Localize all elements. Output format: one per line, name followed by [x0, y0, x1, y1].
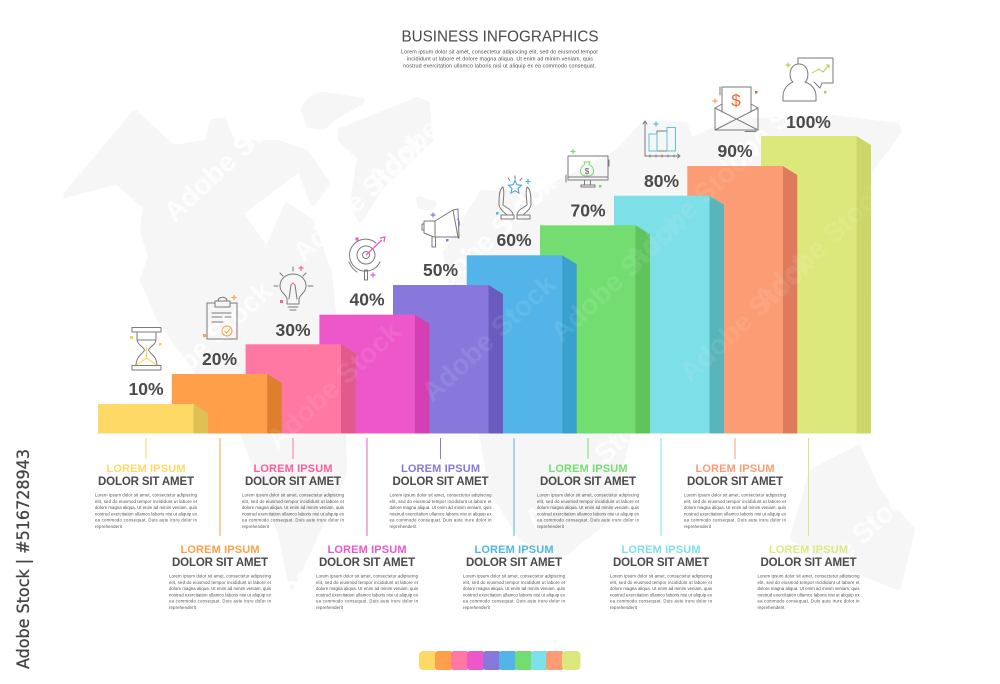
text block 1 — [95, 463, 198, 529]
text block 2: DOLOR SIT AMET — [172, 557, 268, 569]
text block 1: DOLOR SIT AMET — [98, 476, 194, 488]
text block 7: dolore magna aliqua. Ut enim ad minim veniam, quis — [537, 505, 639, 510]
text block 3: DOLOR SIT AMET — [245, 476, 341, 488]
watermark over map: Adobe Stock — [286, 128, 433, 268]
text block 5: reprehenderit — [390, 524, 417, 529]
text block 1: reprehenderit — [95, 524, 123, 529]
watermark over map: Adobe Stock — [231, 15, 378, 155]
icon: person with speech bubble — [783, 58, 833, 101]
text block 2 — [169, 544, 272, 610]
watermark over map: Adobe Stock — [2, 235, 149, 375]
text block 9: ea commodo consequat. Duis aute irure dolor in — [684, 518, 787, 523]
watermark over map: Adobe Stock — [157, 88, 304, 228]
watermark over map: Adobe Stock — [821, 102, 968, 242]
colour palette legend — [419, 651, 580, 670]
text block 4: dolore magna aliqua. Ut enim ad minim veniam, quis — [316, 586, 418, 591]
percentage labels: 90% — [717, 141, 753, 161]
text block 7: reprehenderit — [537, 524, 565, 529]
text block 6: DOLOR SIT AMET — [466, 557, 562, 569]
text block 3: LOREM IPSUM — [254, 463, 332, 475]
percentage labels: 60% — [496, 230, 532, 250]
text block 8: reprehenderit — [610, 605, 638, 610]
faint watermark over bars — [260, 135, 894, 455]
text block 8 — [610, 544, 713, 610]
bar 20% — [172, 374, 282, 434]
text block 4: Lorem ipsum dolor sit amet, consectetur adipiscing — [316, 574, 419, 578]
text block 7: elit, sed do eiusmod tempor incididunt ut labore et — [537, 499, 640, 504]
text block 2: reprehenderit — [169, 605, 197, 610]
text block 1: ea commodo consequat. Duis aute irure dolor in — [95, 518, 198, 523]
text block 5 — [390, 463, 492, 529]
bar 50% — [393, 285, 503, 434]
watermark over map: Adobe Stock — [260, 315, 407, 455]
bar 60% — [467, 255, 577, 434]
text block 6: dolore magna aliqua. Ut enim ad minim veniam, quis — [463, 586, 565, 591]
text block 8: nostrud exercitation ullamco laboris nisi ut aliquip ex — [610, 592, 713, 597]
text block 5: nostrud exercitation ullamco laboris nisi ut aliquip ex — [390, 511, 492, 516]
bar 90% — [687, 166, 797, 434]
text block 3: Lorem ipsum dolor sit amet, consectetur adipiscing — [242, 492, 345, 498]
text block 10: reprehenderit — [758, 605, 785, 610]
text block 6: Lorem ipsum dolor sit amet, consectetur adipiscing — [463, 574, 566, 578]
text block 5: elit, sed do eiusmod tempor incididunt ut labore et — [390, 499, 492, 504]
icon: envelope with dollar letter: $ — [731, 91, 741, 110]
text block 7: ea commodo consequat. Duis aute irure dolor in — [537, 518, 640, 523]
text block 5: Lorem ipsum dolor sit amet, consectetur adipiscing — [390, 492, 492, 498]
faint watermark over bars: Adobe Stock — [618, 135, 765, 275]
text block 10: ea commodo consequat. Duis aute irure dolor in — [758, 599, 860, 604]
bar 100% — [761, 136, 871, 434]
watermark over map: Adobe Stock — [692, 62, 839, 202]
text block 6: nostrud exercitation ullamco laboris nisi ut aliquip ex — [463, 592, 566, 597]
watermark over map: Adobe Stock — [563, 22, 710, 162]
text block 8: LOREM IPSUM — [622, 544, 700, 556]
watermark over map: Adobe Stock — [489, 95, 636, 235]
icon: clipboard — [203, 295, 237, 339]
icon: envelope with dollar letter — [712, 87, 758, 132]
text block 9: nostrud exercitation ullamco laboris nisi ut aliquip ex — [684, 511, 787, 516]
text block 10: Lorem ipsum dolor sit amet, consectetur adipiscing — [758, 574, 860, 578]
percentage labels: 40% — [349, 290, 385, 310]
bar 80% — [614, 196, 724, 434]
text block 6: ea commodo consequat. Duis aute irure dolor in — [463, 599, 566, 604]
faint watermark over bars: Adobe Stock — [260, 315, 407, 455]
text block 6 — [463, 544, 566, 610]
text block 6: LOREM IPSUM — [474, 544, 554, 556]
text block 2: LOREM IPSUM — [180, 544, 260, 556]
text block 4 — [316, 544, 419, 610]
icon: monitor with money bag — [566, 149, 609, 188]
text block 1: LOREM IPSUM — [106, 463, 186, 475]
percentage labels: 30% — [275, 320, 311, 340]
text block 8: Lorem ipsum dolor sit amet, consectetur adipiscing — [610, 574, 713, 578]
text block 4: ea commodo consequat. Duis aute irure dolor in — [316, 599, 419, 604]
text block 10 — [758, 544, 860, 610]
percentage labels: 20% — [202, 349, 237, 369]
text block 9: dolore magna aliqua. Ut enim ad minim veniam, quis — [684, 505, 786, 510]
text block 5: ea commodo consequat. Duis aute irure dolor in — [390, 518, 492, 523]
bar 30% — [246, 344, 356, 434]
text block 10: DOLOR SIT AMET — [760, 557, 856, 569]
watermark over map: Adobe Stock — [360, 55, 507, 195]
text block 6: elit, sed do eiusmod tempor incididunt ut labore et — [463, 580, 566, 585]
subtitle text — [401, 50, 598, 70]
title: BUSINESS INFOGRAPHICS — [402, 28, 598, 46]
icon: target with arrow — [349, 237, 385, 280]
watermark over map: Adobe Stock — [415, 168, 562, 308]
percentage labels: 10% — [128, 379, 164, 399]
watermark over map: Adobe Stock — [518, 395, 665, 535]
text block 1: elit, sed do eiusmod tempor incididunt ut labore et — [95, 499, 198, 504]
text block 2: ea commodo consequat. Duis aute irure dolor in — [169, 599, 272, 604]
watermark over map: Adobe Stock — [647, 435, 794, 575]
watermark over map: Adobe Stock — [105, 462, 252, 602]
text block 9: Lorem ipsum dolor sit amet, consectetur adipiscing — [684, 492, 787, 498]
icon: hands holding star — [496, 176, 531, 219]
watermark over map: Adobe Stock — [618, 135, 765, 275]
stock id side label: Adobe Stock | #516728943 — [14, 449, 34, 669]
icon: bar chart — [643, 121, 680, 158]
bar chart: staircase 10 to 100 percent — [98, 136, 871, 434]
text block 6: reprehenderit — [463, 605, 491, 610]
subtitle text: Lorem ipsum dolor sit amet, consectetur adipiscing elit, sed do eiusmod tempor — [401, 50, 598, 56]
text block 7: Lorem ipsum dolor sit amet, consectetur adipiscing — [537, 492, 640, 498]
percentage labels — [128, 112, 831, 399]
percentage labels: 80% — [644, 171, 679, 191]
text block 2: Lorem ipsum dolor sit amet, consectetur adipiscing — [169, 574, 272, 578]
bar 10% — [98, 404, 208, 434]
text block 7: LOREM IPSUM — [548, 463, 628, 475]
bar 70% — [540, 225, 650, 434]
text block 10: elit, sed do eiusmod tempor incididunt ut labore et — [758, 580, 860, 585]
percentage labels: 70% — [570, 200, 606, 220]
text block 8: elit, sed do eiusmod tempor incididunt ut labore et — [610, 580, 713, 585]
text block 3: ea commodo consequat. Duis aute irure dolor in — [242, 518, 345, 523]
icon: hourglass — [130, 328, 162, 370]
subtitle text: nostrud exercitation ullamco laboris nisi ut aliquip ex ea commodo consequat. — [403, 64, 596, 70]
text block 9: reprehenderit — [684, 524, 712, 529]
text block 4: nostrud exercitation ullamco laboris nisi ut aliquip ex — [316, 592, 419, 597]
subtitle text: incididunt ut labore et dolore magna aliqua. Ut enim ad minim veniam, quis — [407, 56, 593, 62]
text block 3: elit, sed do eiusmod tempor incididunt ut labore et — [242, 499, 345, 504]
icon: monitor with money bag: $ — [585, 167, 590, 176]
watermark over map: Adobe Stock — [28, 48, 175, 188]
watermark over map: Adobe Stock — [234, 502, 381, 642]
percentage labels: 50% — [423, 260, 458, 280]
text block 4: LOREM IPSUM — [328, 544, 406, 556]
text block 5: dolore magna aliqua. Ut enim ad minim veniam, quis — [390, 505, 492, 510]
text block 7: nostrud exercitation ullamco laboris nisi ut aliquip ex — [537, 511, 640, 516]
text block 9: elit, sed do eiusmod tempor incididunt ut labore et — [684, 499, 787, 504]
text block 7 — [537, 463, 640, 529]
text block 1: dolore magna aliqua. Ut enim ad minim veniam, quis — [95, 505, 197, 510]
watermark over map: Adobe Stock — [131, 275, 278, 415]
text block 2: elit, sed do eiusmod tempor incididunt ut labore et — [169, 580, 272, 585]
text block 9 — [684, 463, 787, 529]
text block 3: nostrud exercitation ullamco laboris nisi ut aliquip ex — [242, 511, 345, 516]
faint watermark over bars: Adobe Stock — [747, 175, 894, 315]
text block 3: dolore magna aliqua. Ut enim ad minim veniam, quis — [242, 505, 344, 510]
bar 40% — [319, 315, 429, 434]
text block 4: reprehenderit — [316, 605, 344, 610]
text block 10: nostrud exercitation ullamco laboris nisi ut aliquip ex — [758, 592, 860, 597]
percentage labels: 100% — [786, 112, 831, 132]
text block 3 — [242, 463, 345, 529]
connector lines — [146, 438, 808, 536]
text block 10: dolore magna aliqua. Ut enim ad minim veniam, quis — [758, 586, 860, 591]
text block 8: ea commodo consequat. Duis aute irure dolor in — [610, 599, 713, 604]
text block 3: reprehenderit — [242, 524, 270, 529]
text block 4: DOLOR SIT AMET — [319, 557, 415, 569]
text block 9: LOREM IPSUM — [696, 463, 774, 475]
faint watermark over bars: Adobe Stock — [544, 208, 691, 348]
text block 8: dolore magna aliqua. Ut enim ad minim veniam, quis — [610, 586, 712, 591]
text block 5: LOREM IPSUM — [401, 463, 480, 475]
watermark over map: Adobe Stock — [776, 475, 923, 615]
text block 1: nostrud exercitation ullamco laboris nisi ut aliquip ex — [95, 511, 198, 516]
text block 2: dolore magna aliqua. Ut enim ad minim veniam, quis — [169, 586, 271, 591]
text block 10: LOREM IPSUM — [769, 544, 848, 556]
text block 1: Lorem ipsum dolor sit amet, consectetur adipiscing — [95, 492, 198, 498]
background world map — [66, 95, 912, 587]
faint watermark over bars: Adobe Stock — [415, 268, 562, 408]
text block 4: elit, sed do eiusmod tempor incididunt ut labore et — [316, 580, 419, 585]
text block 9: DOLOR SIT AMET — [687, 476, 783, 488]
text block 5: DOLOR SIT AMET — [392, 476, 488, 488]
text block 7: DOLOR SIT AMET — [540, 476, 636, 488]
text block 2: nostrud exercitation ullamco laboris nisi ut aliquip ex — [169, 592, 272, 597]
faint watermark over bars: Adobe Stock — [673, 248, 820, 388]
icon: megaphone — [422, 209, 459, 247]
text block 8: DOLOR SIT AMET — [613, 557, 709, 569]
icon: light bulb — [274, 266, 313, 310]
